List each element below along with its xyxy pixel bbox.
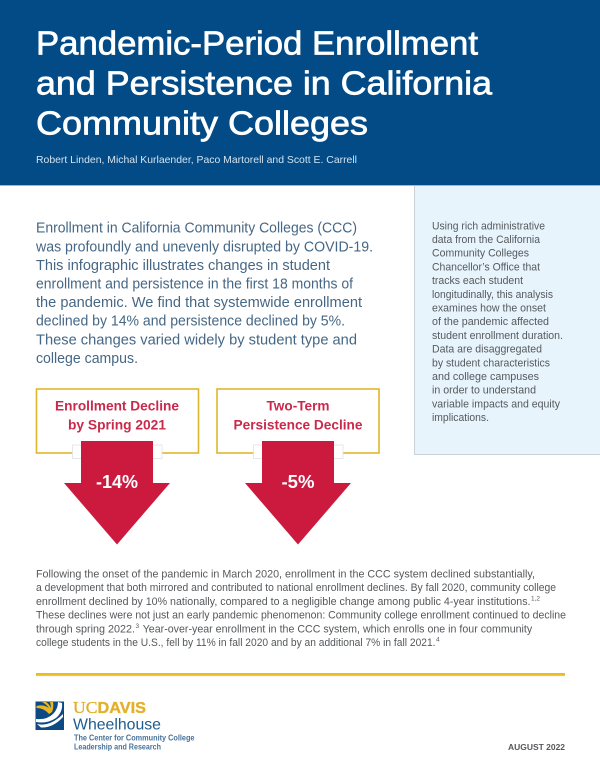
callout heading: Persistence Decline: [234, 417, 363, 432]
arrow: down, -14%: -14%: [96, 471, 138, 492]
intro paragraph: was profoundly and unevenly disrupted by COVID-19.: [35, 238, 373, 255]
callout heading: by Spring 2021: [68, 417, 166, 432]
body paragraph: 4: [436, 637, 440, 644]
body paragraph: 3: [136, 623, 140, 630]
gold divider rule: [36, 673, 565, 676]
authors: Robert Linden, Michal Kurlaender, Paco Martorell and Scott E. Carrell: [36, 155, 357, 166]
intro paragraph: This infographic illustrates changes in student: [36, 257, 331, 274]
body paragraph: [36, 568, 566, 649]
body paragraph: college students in the U.S., fell by 11% in fall 2020 and by an additional 7% in fall 2021.: [36, 637, 436, 649]
intro paragraph: Enrollment in California Community Colleges (CCC): [36, 220, 357, 237]
callout heading: [55, 399, 179, 432]
intro paragraph: declined by 14% and persistence declined by 5%.: [36, 313, 345, 330]
body paragraph: a development that both mirrored and contributed to national enrollment declines. By fall 2020, community college: [36, 582, 556, 594]
title: Pandemic-Period Enrollment: [36, 26, 479, 62]
callout: persistence decline: [217, 389, 379, 544]
sidebar text: by student characteristics: [432, 357, 550, 369]
sidebar text: implications.: [432, 412, 489, 424]
title: Community Colleges: [36, 106, 368, 142]
sidebar text: variable impacts and equity: [432, 398, 561, 410]
callout heading: Two-Term: [266, 399, 330, 414]
sidebar text: longitudinally, this analysis: [432, 289, 553, 301]
body paragraph: These declines were not just an early pandemic phenomenon: Community college enrollment continued to decline: [36, 610, 566, 622]
sidebar text: data from the California: [432, 234, 540, 246]
wordmark: Wheelhouse: Wheelhouse: [73, 716, 161, 733]
tagline: [74, 734, 195, 751]
intro paragraph: [35, 220, 373, 367]
wordmark: UC Davis: UCDAVIS: [73, 698, 146, 717]
title: [36, 26, 492, 142]
intro paragraph: These changes varied widely by student type and: [36, 331, 357, 348]
arrow: down, -5%: -5%: [282, 471, 314, 492]
sidebar text: tracks each student: [432, 275, 523, 287]
tagline: Leadership and Research: [74, 742, 161, 751]
body paragraph: through spring 2022.: [36, 623, 135, 635]
panel: header band: [0, 0, 600, 186]
sidebar text: [432, 220, 563, 424]
body paragraph: Following the onset of the pandemic in March 2020, enrollment in the CCC system declined substantially,: [36, 568, 535, 580]
sidebar text: Using rich administrative: [432, 220, 545, 232]
body paragraph: enrollment declined by 10% nationally, compared to a negligible change among public 4-year institutions.: [36, 596, 530, 608]
sidebar text: and college campuses: [432, 371, 539, 383]
arrow: down, -5%: [245, 441, 351, 544]
title: and Persistence in California: [36, 66, 492, 102]
body paragraph: Year-over-year enrollment in the CCC system, which enrolls one in four community: [143, 623, 533, 635]
logo: UC Davis Wheelhouse: [36, 698, 195, 751]
sidebar text: student enrollment duration.: [432, 330, 563, 342]
callout: enrollment decline: [36, 389, 198, 544]
callout heading: Enrollment Decline: [55, 399, 179, 414]
arrow: down, -14%: [64, 441, 170, 544]
tagline: The Center for Community College: [74, 734, 195, 743]
body paragraph: 1,2: [531, 596, 540, 602]
callout heading: [234, 399, 363, 432]
sidebar text: in order to understand: [432, 385, 536, 397]
intro paragraph: enrollment and persistence in the first 18 months of: [36, 276, 354, 292]
sidebar text: Community Colleges: [432, 248, 529, 260]
sidebar text: examines how the onset: [432, 302, 546, 314]
intro paragraph: the pandemic. We find that systemwide enrollment: [36, 294, 363, 311]
sidebar text: Chancellor’s Office that: [432, 261, 540, 273]
sidebar text: of the pandemic affected: [432, 316, 549, 328]
icon: wheel emblem: [36, 702, 64, 730]
intro paragraph: college campus.: [36, 350, 138, 367]
date: AUGUST 2022: [508, 743, 565, 752]
sidebar text: Data are disaggregated: [432, 344, 542, 356]
panel: sidebar methods note: [414, 186, 600, 455]
